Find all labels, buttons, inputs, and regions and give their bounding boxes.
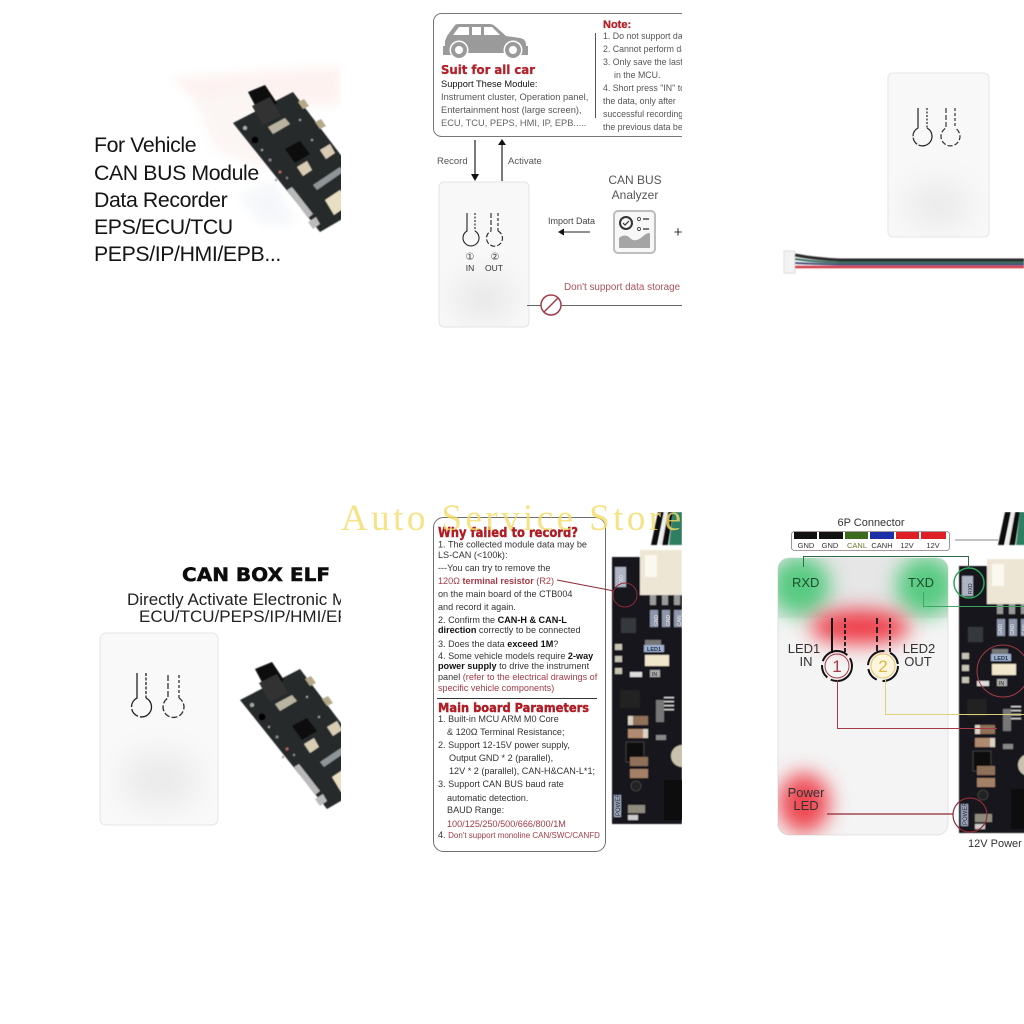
product description text xyxy=(94,133,281,266)
white device xyxy=(100,633,218,825)
callout: R2 resistor xyxy=(557,580,637,607)
circuit board close-up: CAN xyxy=(677,615,683,626)
circuit board close-up: POWER xyxy=(616,793,622,816)
label: Power LED: LED xyxy=(793,798,819,813)
icon: prohibited xyxy=(541,295,561,315)
connector cable xyxy=(784,251,1024,273)
circuit board close-up: GND xyxy=(666,614,672,626)
arrow: record xyxy=(471,140,479,181)
connector pinout legend: 12V xyxy=(926,541,940,550)
subtitle: Directly Activate Electronic Module xyxy=(127,590,388,609)
keyhole right xyxy=(941,108,960,146)
circuit board close-up: GND xyxy=(998,624,1004,635)
supported modules text: Entertainment host (large screen), xyxy=(441,105,582,115)
label: record: Record xyxy=(437,156,468,167)
CAN BUS analyzer title: Analyzer xyxy=(612,188,658,202)
product description text: CAN BUS Module xyxy=(94,161,259,185)
product description text: EPS/ECU/TCU xyxy=(94,215,233,239)
label: TXD: TXD xyxy=(908,575,934,590)
connector pinout legend xyxy=(792,532,950,550)
keyhole left xyxy=(913,108,932,146)
icon: analyzer xyxy=(614,211,655,253)
white device xyxy=(439,182,529,327)
text OUT: OUT xyxy=(485,263,503,273)
heading: suit for all car: Suit for all car xyxy=(441,62,536,77)
RXD leader xyxy=(804,556,984,598)
troubleshooting list: ---You can try to remove the xyxy=(438,563,550,573)
parameters list: 12V * 2 (parallel), CAN-H&CAN-L*1; xyxy=(449,766,595,776)
label: LED1 IN: LED1 xyxy=(788,641,820,656)
note list xyxy=(603,32,682,132)
parameters list: Output GND * 2 (parallel), xyxy=(449,753,553,763)
label: LED1 IN: IN xyxy=(800,654,812,669)
keyhole right xyxy=(163,675,184,717)
number 2: 2 xyxy=(878,657,888,676)
troubleshooting list: 120Ω terminal resistor (R2) xyxy=(438,576,554,586)
icon: car xyxy=(443,24,528,60)
troubleshooting list: LS-CAN (<100k): xyxy=(438,550,508,560)
label: LED2 OUT: LED2 xyxy=(903,641,935,656)
parameters list: 1. Built-in MCU ARM M0 Core xyxy=(438,714,559,724)
note heading: Note: xyxy=(603,19,631,31)
heading: CAN BOX ELF xyxy=(182,564,330,586)
heading: main board parameters: Main board Parameters xyxy=(438,700,589,715)
label: 12V power: 12V Power xyxy=(968,838,1022,850)
note list: 4. Short press "IN" to xyxy=(603,83,685,93)
TXD leader xyxy=(924,592,1024,606)
label: Power LED: Power xyxy=(788,785,825,800)
keyhole IN xyxy=(463,213,479,246)
product description text: Data Recorder xyxy=(94,188,228,212)
divider line xyxy=(595,33,596,118)
troubleshooting list: 1. The collected module data may be xyxy=(438,540,587,550)
troubleshooting list xyxy=(438,540,598,693)
note list: 1. Do not support data xyxy=(603,31,690,41)
panel: device and cable xyxy=(784,73,1024,273)
panel: CAN BOX ELF xyxy=(100,567,341,826)
circuit board close-up: POWER xyxy=(963,802,969,825)
parameters list: BAUD Range: xyxy=(447,805,504,815)
troubleshooting list: panel (refer to the electrical drawings of xyxy=(438,672,598,682)
power LED leader xyxy=(827,798,987,832)
CAN BUS analyzer title xyxy=(609,176,662,202)
supported modules text xyxy=(441,79,588,128)
label: LED2 OUT: OUT xyxy=(904,654,932,669)
ghost car background xyxy=(170,66,341,225)
product description text: For Vehicle xyxy=(94,133,196,157)
label: import data: Import Data xyxy=(548,216,595,226)
troubleshooting list: 2. Confirm the CAN-H & CAN-L xyxy=(438,615,567,625)
panel: why failed to record xyxy=(434,512,693,852)
circuit board photo xyxy=(240,661,341,810)
subtitle xyxy=(128,593,341,622)
circuit board close-up: IN xyxy=(652,672,657,678)
note list: successful recording xyxy=(603,109,683,119)
panel: suit for all car recording diagram xyxy=(433,13,682,328)
connector pinout legend: CANL xyxy=(847,541,867,550)
arrow: import data xyxy=(558,228,590,236)
text IN: IN xyxy=(466,263,474,273)
note list: 3. Only save the last xyxy=(603,57,683,67)
label: Power LED xyxy=(788,785,825,813)
parameters list: 100/125/250/500/666/800/1M xyxy=(447,819,566,829)
circuit board close-up: LED1 xyxy=(647,647,661,653)
circuit board close-up: IN xyxy=(999,681,1004,687)
note list: the data, only after xyxy=(603,96,676,106)
troubleshooting list: and record it again. xyxy=(438,602,516,612)
supported modules text: ECU, TCU, PEPS, HMI, IP, EPB..... xyxy=(441,118,586,128)
info box outline xyxy=(433,13,682,137)
label: number 2: ② xyxy=(491,252,499,263)
warning text: Don't support data storage xyxy=(564,282,681,293)
white device with glows xyxy=(770,556,956,835)
label: number 1: ① xyxy=(466,252,474,263)
keyhole 2 xyxy=(868,618,898,681)
product description text: PEPS/IP/HMI/EPB... xyxy=(94,242,281,266)
parameters list: 4. Don't support monoline CAN/SWC/CANFD xyxy=(438,830,600,840)
connector pinout legend: CANH xyxy=(871,541,893,550)
arrow: activate xyxy=(498,139,506,181)
parameters list: & 120Ω Terminal Resistance; xyxy=(447,727,564,737)
connector pinout legend: GND xyxy=(822,541,839,550)
keyhole OUT xyxy=(486,213,502,246)
note list: the previous data be xyxy=(603,122,683,132)
parameters list: 2. Support 12-15V power supply, xyxy=(438,740,570,750)
note list: 2. Cannot perform data xyxy=(603,44,694,54)
troubleshooting list: 4. Some vehicle models require 2-way xyxy=(438,651,594,661)
circuit board close-up: LED1 xyxy=(994,656,1008,662)
parameters list: 3. Support CAN BUS baud rate xyxy=(438,779,564,789)
wires xyxy=(998,512,1024,545)
circuit board close-up xyxy=(612,512,693,824)
watermark: Auto Service Store xyxy=(341,498,681,539)
LED1 leader xyxy=(838,645,1024,728)
storage line xyxy=(527,305,682,306)
troubleshooting list: specific vehicle components) xyxy=(438,683,554,693)
heading: why failed: Why failed to record? xyxy=(438,526,578,541)
parameters list xyxy=(438,714,600,840)
troubleshooting list: power supply to drive the instrument xyxy=(438,661,590,671)
keyhole 1 xyxy=(822,618,852,681)
troubleshooting list: 3. Does the data exceed 1M? xyxy=(438,639,558,649)
supported modules text: Instrument cluster, Operation panel, xyxy=(441,92,588,102)
circuit board close-up: RXD xyxy=(968,583,974,594)
circuit board close-up: TXD xyxy=(619,575,625,585)
glows clipped to device xyxy=(770,556,956,833)
label: RXD: RXD xyxy=(792,575,819,590)
number 1: 1 xyxy=(832,657,842,676)
circuit board photo xyxy=(232,84,341,232)
keyhole left xyxy=(132,673,152,717)
connector pinout legend: 12V xyxy=(900,541,914,550)
LED2 leader xyxy=(886,680,1024,714)
divider xyxy=(437,698,597,700)
panel: vehicle CAN BUS module data recorder xyxy=(95,68,341,261)
white device xyxy=(888,73,989,237)
plus sign: + xyxy=(674,224,683,241)
title: 6P connector: 6P Connector xyxy=(837,517,905,529)
CAN BUS analyzer title: CAN BUS xyxy=(608,173,662,187)
connector pinout legend: GND xyxy=(798,541,815,550)
parameters list: automatic detection. xyxy=(447,793,528,803)
circuit board close-up: GND xyxy=(1010,624,1016,635)
note list: in the MCU. xyxy=(614,70,660,80)
label: LED2 OUT xyxy=(903,641,935,669)
info box outline xyxy=(434,518,606,852)
circuit board close-up: GND xyxy=(654,614,660,626)
subtitle: ECU/TCU/PEPS/IP/HMI/EPB... xyxy=(139,607,374,626)
label: LED1 IN xyxy=(788,641,820,669)
label: activate: Activate xyxy=(508,156,542,167)
troubleshooting list: on the main board of the CTB004 xyxy=(438,589,572,599)
troubleshooting list: direction correctly to be connected xyxy=(438,625,581,635)
supported modules text: Support These Module: xyxy=(441,79,537,89)
panel: connector and LED guide xyxy=(770,512,1024,850)
connector leader line xyxy=(955,539,998,541)
circuit board close-up xyxy=(959,559,1024,833)
